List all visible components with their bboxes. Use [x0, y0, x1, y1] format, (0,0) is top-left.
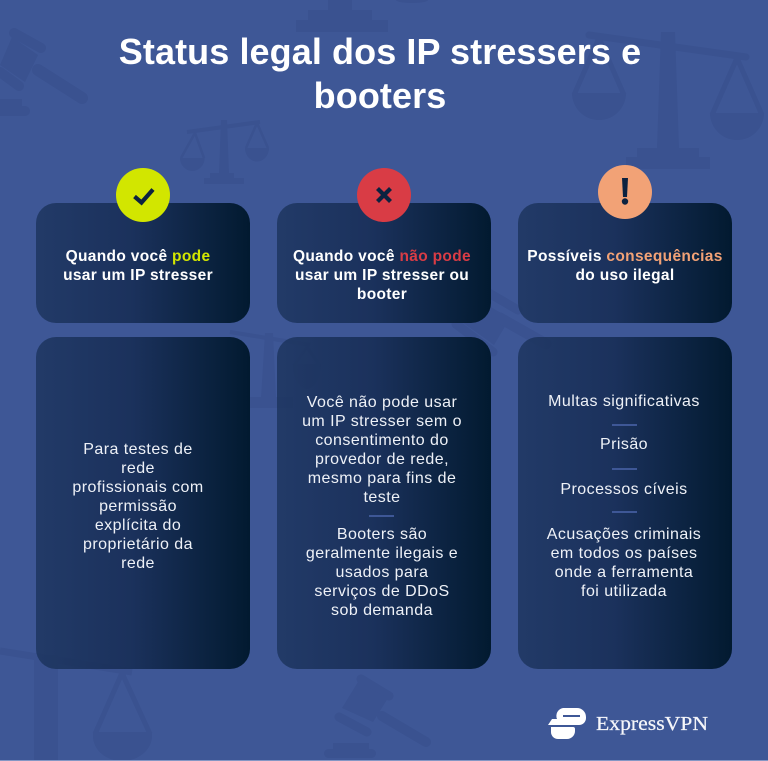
body text	[72, 441, 204, 572]
heading text	[527, 248, 723, 284]
panel: cannot use heading	[277, 203, 491, 323]
panel: cannot use body	[277, 337, 491, 669]
icon: cross	[357, 168, 411, 222]
body text: proprietário da	[83, 536, 193, 553]
heading text: usar um IP stresser ou	[295, 267, 469, 284]
scale bottom-left	[0, 651, 152, 761]
body text: profissionais com	[72, 479, 204, 496]
item: civil suits: Processos cíveis	[560, 481, 688, 498]
body text: rede	[121, 460, 155, 477]
first paragraph: Você não pode usar	[307, 394, 457, 411]
item: prison: Prisão	[600, 436, 648, 453]
panel: consequences heading	[518, 203, 732, 323]
first paragraph: um IP stresser sem o	[302, 413, 462, 430]
body text: rede	[121, 555, 155, 572]
first paragraph: mesmo para fins de	[308, 470, 456, 487]
first paragraph	[302, 394, 462, 506]
icon: logo mark	[548, 708, 586, 739]
scale centre left	[230, 332, 321, 408]
item: criminal charges	[546, 526, 701, 600]
second paragraph: sob demanda	[331, 602, 433, 619]
panel: can use body	[36, 337, 250, 669]
first paragraph: provedor de rede,	[315, 451, 449, 468]
body text: explícita do	[95, 517, 181, 534]
second paragraph	[306, 526, 458, 619]
heading text: Quando você pode	[66, 248, 210, 265]
item: criminal charges: em todos os países	[551, 545, 697, 562]
scale base top centre	[296, 0, 428, 32]
gavel bottom centre	[324, 679, 426, 758]
second paragraph: usados para	[335, 564, 428, 581]
heading text: do uso ilegal	[575, 267, 675, 284]
heading text: usar um IP stresser	[63, 267, 213, 284]
title: Status legal dos IP stressers e	[119, 31, 641, 72]
item: criminal charges: Acusações criminais	[547, 526, 701, 543]
gavel top-left	[0, 33, 82, 116]
panel: can use heading	[36, 203, 250, 323]
icon: check	[116, 168, 170, 222]
item: fines: Multas significativas	[548, 393, 700, 410]
heading text	[63, 248, 213, 284]
heading text: Possíveis consequências	[527, 248, 723, 265]
second paragraph: serviços de DDoS	[314, 583, 450, 600]
title: booters	[314, 75, 446, 116]
body text: permissão	[99, 498, 177, 515]
heading text: booter	[357, 286, 407, 303]
heading text	[293, 248, 471, 303]
second paragraph: Booters são	[337, 526, 427, 543]
title	[119, 31, 641, 116]
first paragraph: consentimento do	[315, 432, 449, 449]
panel: consequences body	[518, 337, 732, 669]
logo: ExpressVPN	[548, 708, 708, 739]
item: criminal charges: foi utilizada	[581, 583, 667, 600]
large scale top right	[572, 32, 764, 169]
heading text: Quando você não pode	[293, 248, 471, 265]
icon: exclamation	[598, 165, 652, 219]
body text: Para testes de	[83, 441, 193, 458]
item: criminal charges: onde a ferramenta	[555, 564, 693, 581]
small scale	[180, 120, 269, 184]
first paragraph: teste	[364, 489, 400, 506]
gavel centre right	[456, 289, 546, 352]
second paragraph: geralmente ilegais e	[306, 545, 458, 562]
wordmark: ExpressVPN	[596, 713, 708, 735]
